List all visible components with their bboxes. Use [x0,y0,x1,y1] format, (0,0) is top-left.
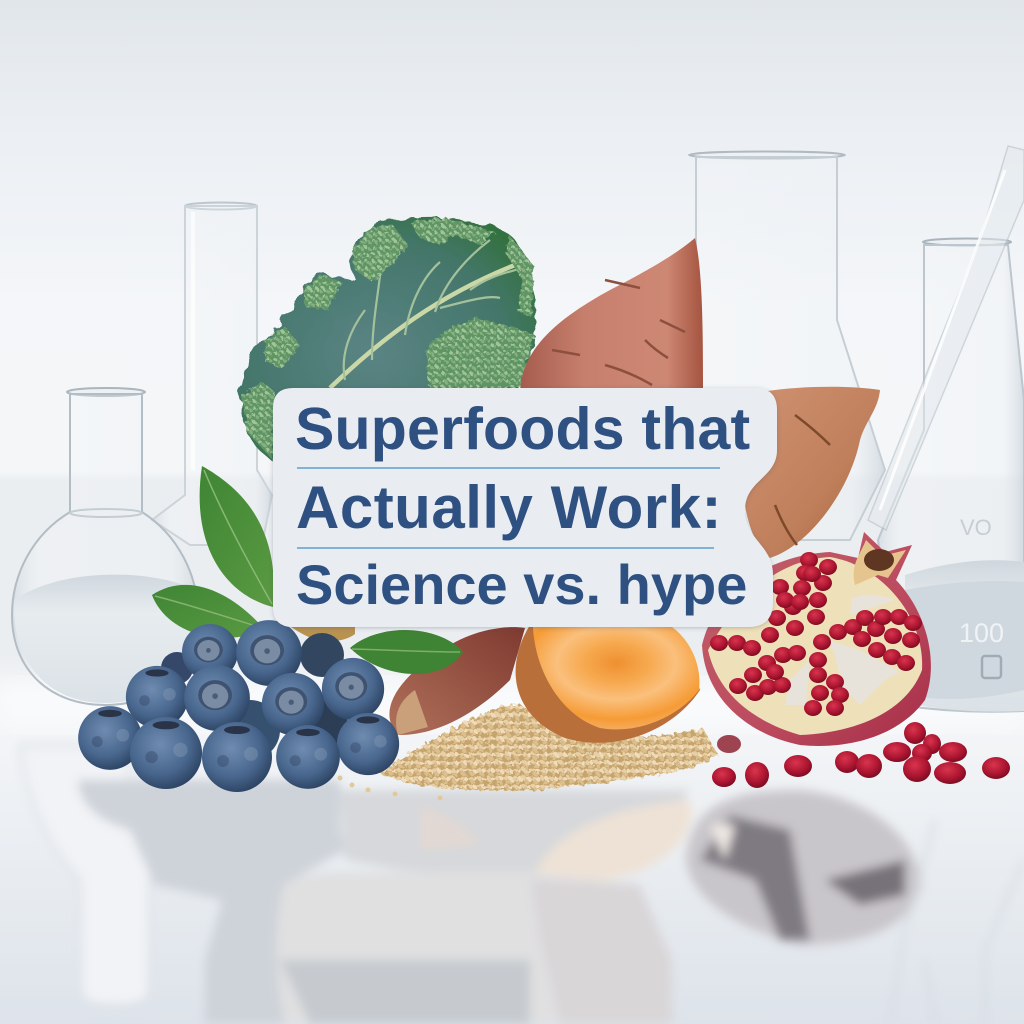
soft table shine [0,680,1024,730]
kale leaf [241,217,535,462]
arils [710,552,922,716]
reflection: beakers [890,820,1024,1024]
leaf: right [350,630,463,674]
reflection: flask [20,745,176,1006]
title line 1: Superfoods that [295,396,750,462]
right beaker flask: VO [960,515,992,540]
curly kale fringe [242,218,535,460]
divider 1 [297,467,720,469]
blueberries [78,620,399,792]
golden husk behind card [278,615,355,642]
loose pomegranate seeds [712,722,1010,788]
large conical flask [640,152,885,540]
reflection: blueberries [78,780,345,1024]
reflection: central shadow [340,790,690,880]
bottom sweet potato [389,627,525,735]
white pith [785,594,900,705]
leaf: left [152,585,265,638]
top sweet potato [520,238,703,392]
divider 2 [297,547,714,549]
orange sweet potato half [516,625,700,743]
title card background [273,388,777,627]
water [14,575,197,703]
reflection: sweet potatoes [277,872,672,1024]
right beaker flask [878,238,1024,712]
reflections on table [20,745,1024,1024]
title line 3: Science vs. hype [296,553,747,616]
reflection: pomegranate [686,790,922,945]
tall cylinder [152,202,272,545]
title line 2: Actually Work: [296,474,722,541]
reflection: sweet potato half [533,800,692,880]
pomegranate [702,532,931,746]
leaf: upper [200,466,274,607]
right sweet potato [741,387,880,558]
quinoa pile [338,704,718,800]
title card [295,396,750,616]
round flask [12,388,198,705]
green leaves [152,466,525,735]
right beaker flask: 100 [959,618,1004,648]
glass rod [868,146,1024,530]
